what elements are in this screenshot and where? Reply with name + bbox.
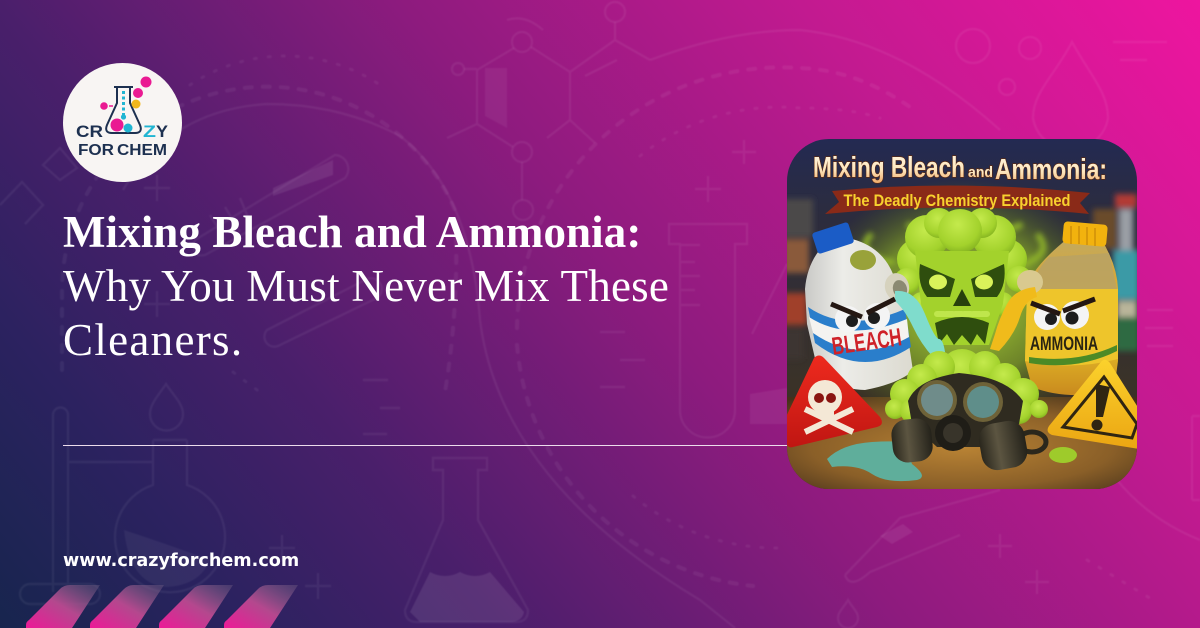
logo wordmark: Y	[156, 122, 169, 141]
table surface	[787, 397, 1137, 489]
title: Why You Must Never Mix These	[63, 261, 669, 311]
toxic glow	[852, 208, 1064, 398]
illustration: bleach and ammonia	[787, 139, 1137, 489]
bleach bottle	[805, 222, 945, 390]
gas mask	[890, 373, 1046, 473]
slime drops	[1049, 447, 1077, 463]
logo	[63, 63, 182, 182]
shelf props	[783, 194, 1139, 359]
logo wordmark: CR	[76, 122, 103, 141]
logo wordmark	[76, 122, 169, 159]
illustration title: Mixing Bleach	[813, 152, 965, 184]
toxic wisps	[865, 224, 1043, 268]
illustration banner	[825, 185, 1090, 214]
illustration title	[814, 155, 1106, 184]
logo wordmark: Z	[143, 122, 156, 141]
icon: flask	[100, 76, 152, 133]
warning sign: exclamation	[1048, 360, 1139, 449]
logo wordmark: FOR	[78, 142, 114, 159]
ammonia label: AMMONIA	[1030, 334, 1098, 355]
website url: www.crazyforchem.com	[63, 551, 299, 571]
toxic skull cloud	[894, 208, 1032, 345]
illustration banner: The Deadly Chemistry Explained	[844, 191, 1070, 210]
illustration title: and	[968, 164, 993, 181]
title	[63, 207, 669, 365]
ammonia bottle	[990, 221, 1118, 395]
bleach label: BLEACH	[830, 323, 903, 361]
scene background	[787, 139, 1137, 489]
spill puddle	[827, 441, 922, 481]
title: Cleaners.	[63, 315, 243, 365]
title: Mixing Bleach and Ammonia:	[63, 207, 641, 257]
divider line	[63, 445, 793, 446]
lower toxic cloud	[885, 349, 1048, 424]
illustration title: Ammonia:	[995, 154, 1107, 186]
logo wordmark: CHEM	[117, 142, 167, 159]
decorative chevrons	[26, 585, 298, 628]
warning sign: skull	[785, 356, 882, 447]
